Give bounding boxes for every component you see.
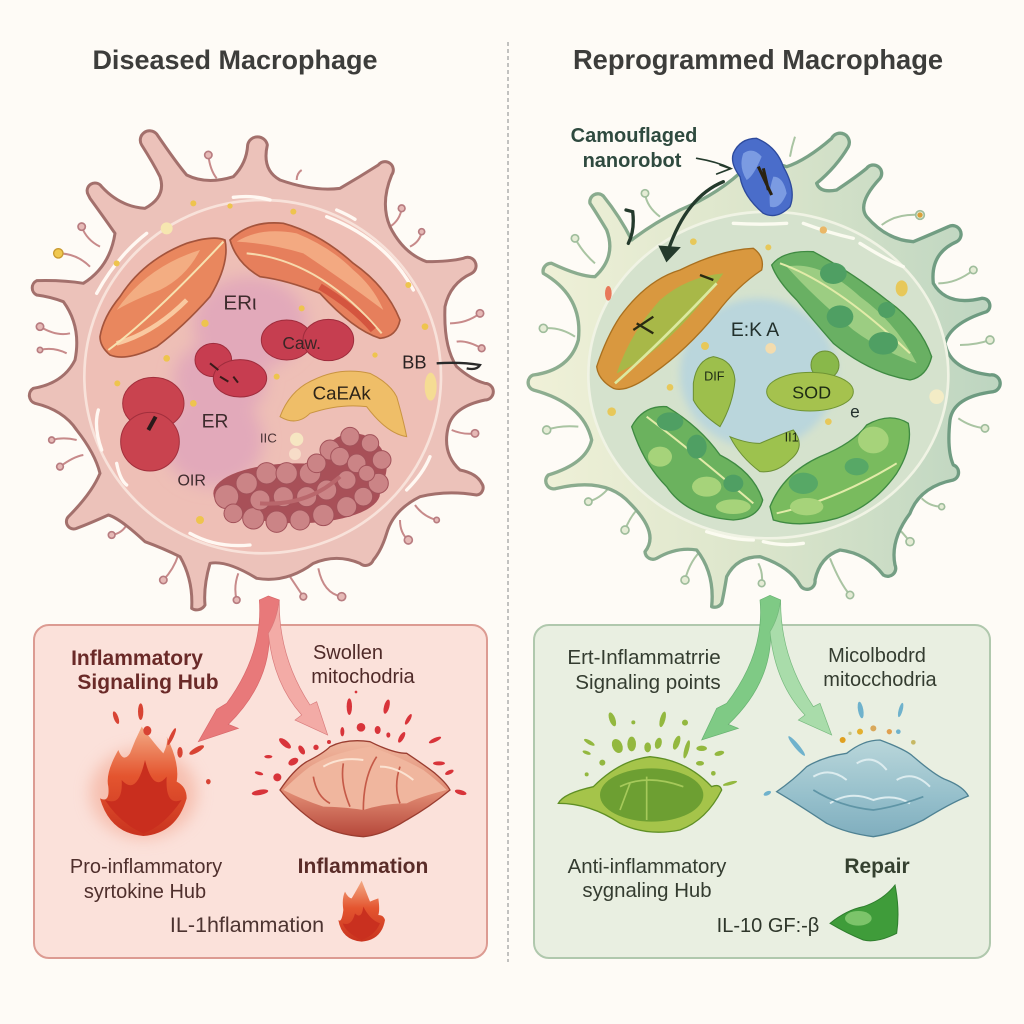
- label: OIR: OIR: [177, 472, 206, 489]
- label: e: e: [850, 401, 860, 421]
- small organelle DIF: [693, 357, 735, 427]
- small organelle DIF: DIF: [704, 370, 725, 384]
- text: inflammatory signaling hub: Inflammatory: [71, 647, 203, 670]
- small organelle lower center: II1: [785, 431, 799, 445]
- yellow granules: [114, 200, 437, 524]
- label: EK A: E:K A: [731, 320, 779, 341]
- text: mitochondria: mitocchodria: [823, 669, 938, 691]
- arrow: reprogrammed cell to anti-inflammatory signaling: [702, 595, 781, 740]
- icon: small flame: [338, 881, 385, 942]
- cell membrane with protrusions: [528, 133, 1000, 607]
- icon: repaired blue mitochondrion: [777, 740, 968, 837]
- title: diseased macrophage: Diseased Macrophage: [92, 45, 378, 75]
- text: IL-1 inflammation: IL-1hflammation: [170, 913, 324, 937]
- text: anti-inflammatory signaling points: Signaling points: [575, 671, 721, 694]
- mitochondrion orange-green upper left: [597, 248, 762, 389]
- text: pro-inflammatory cytokine hub: Pro-inflammatory: [70, 856, 222, 878]
- membrane filaments: [539, 137, 994, 599]
- nucleus area: [163, 277, 307, 487]
- text: swollen mitochondria: mitochodria: [311, 666, 416, 688]
- rim highlights: [707, 223, 903, 545]
- label: camouflaged nanorobot: Camouflaged: [571, 125, 697, 147]
- yellow organelle: [280, 371, 407, 437]
- icon: swollen mitochondrion: [280, 741, 450, 837]
- mitochondrion upper right: [230, 223, 400, 338]
- vesicles: [605, 212, 944, 425]
- text: inflammatory signaling hub: Signaling Hub: [77, 671, 219, 694]
- small organelle SOD: [767, 351, 853, 411]
- label: camouflaged nanorobot: [571, 125, 697, 172]
- panel: reprogrammed outcomes: [534, 625, 990, 958]
- panel: diseased outcomes: [34, 625, 487, 958]
- text: anti-inflammatory signaling hub: Anti-inflammatory: [568, 856, 727, 878]
- small organelle SOD: SOD: [792, 383, 831, 403]
- icon: flame: [90, 727, 197, 838]
- text: pro-inflammatory cytokine hub: [70, 856, 222, 903]
- swollen organelle center: [195, 343, 267, 397]
- icon: green leaf organelle: [558, 757, 722, 832]
- text: inflammation: Inflammation: [298, 855, 428, 878]
- label: HD small: IIC: [260, 431, 277, 446]
- arrow: reprogrammed cell to repaired mitochondria: [770, 600, 832, 735]
- mitochondrion spatter: [251, 691, 467, 796]
- label: BB with arrow: BB: [402, 351, 427, 372]
- label: CaEAk: CaEAk: [313, 382, 371, 403]
- text: pro-inflammatory cytokine hub: syrtokine Hub: [84, 881, 206, 903]
- diseased macrophage cell: [29, 131, 493, 610]
- reprogrammed macrophage cell: [528, 133, 1000, 607]
- text: anti-inflammatory signaling hub: sygnaling Hub: [582, 880, 712, 902]
- reprogrammed panel contents: [558, 595, 968, 941]
- label: Caw: Caw.: [282, 333, 321, 353]
- mitochondrion green upper right: [772, 251, 932, 380]
- arrow: diseased cell to swollen mitochondria: [268, 600, 328, 735]
- text: swollen mitochondria: [311, 642, 416, 688]
- cytoplasm: [84, 200, 441, 553]
- small organelle lower center: [730, 430, 799, 472]
- membrane filaments: [36, 151, 485, 603]
- text: mitochondria: [823, 645, 938, 691]
- text: anti-inflammatory signaling hub: [568, 856, 727, 902]
- label: ERι: ERι: [223, 291, 257, 314]
- label: ER: ER: [202, 411, 228, 432]
- label: camouflaged nanorobot: nanorobot: [583, 150, 682, 172]
- cell membrane with protrusions: [29, 131, 493, 610]
- label: BB with arrow: [402, 351, 480, 372]
- text: repair: Repair: [844, 855, 910, 878]
- arrow: diseased cell to inflammatory signaling: [198, 596, 279, 742]
- swollen organelle left: [121, 377, 184, 471]
- text: IL-10 TGF-beta: IL-10 GF:-β: [717, 915, 819, 937]
- nanorobot body: [732, 138, 792, 216]
- diseased panel contents: [90, 596, 467, 942]
- icon: small green leaf: [830, 885, 898, 941]
- text: anti-inflammatory signaling points: [567, 646, 721, 694]
- text: swollen mitochondria: Swollen: [313, 642, 383, 664]
- mitochondrion green lower right: [770, 418, 909, 524]
- blue sparks: [763, 701, 916, 797]
- nucleus area: [680, 298, 837, 448]
- green sparks: [582, 711, 738, 787]
- bumpy endoplasmic reticulum: [213, 427, 391, 532]
- flame sparks: [112, 703, 211, 784]
- text: inflammatory signaling hub: [71, 647, 219, 694]
- swollen organelle right: [261, 319, 354, 361]
- rim highlights: [96, 197, 430, 546]
- title: reprogrammed macrophage: Reprogrammed Macrophage: [573, 44, 943, 75]
- mitochondrion upper left: [100, 238, 226, 357]
- text: anti-inflammatory signaling points: Ert-Inflammatrrie: [567, 646, 721, 669]
- mitochondrion green lower left: [632, 407, 763, 520]
- text: mitochondria: Micolbodrd: [828, 645, 926, 667]
- arrow: nanorobot entering cell: [626, 158, 731, 261]
- cytoplasm: [588, 212, 948, 538]
